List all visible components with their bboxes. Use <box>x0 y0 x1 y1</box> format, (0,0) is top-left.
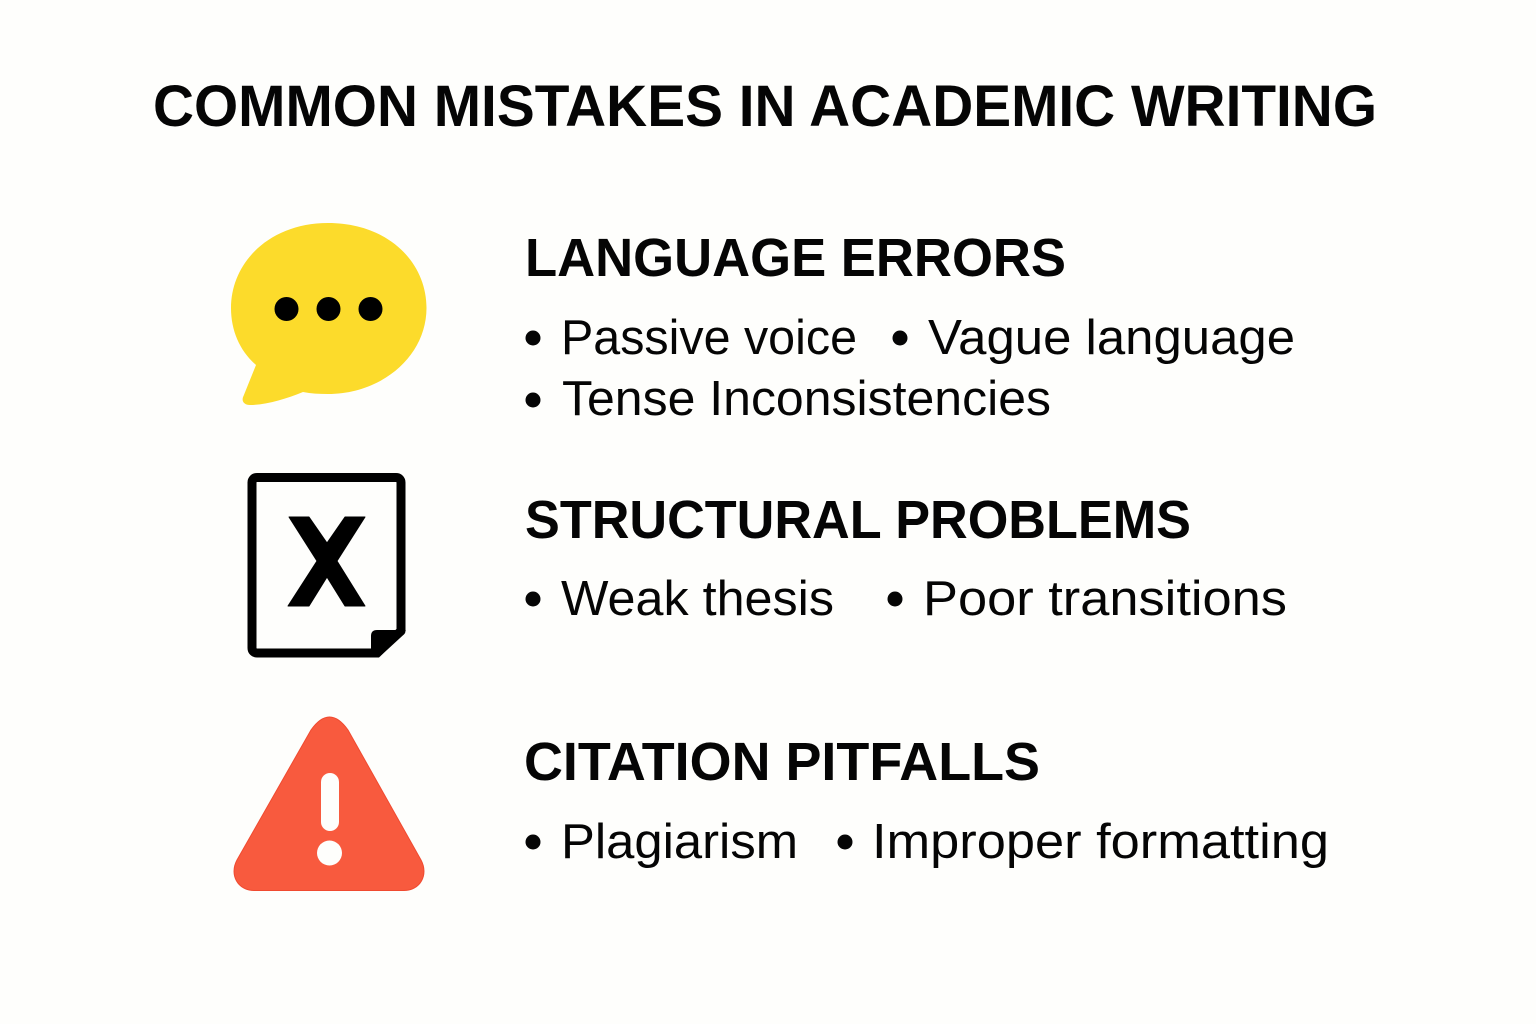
icon: red warning triangle <box>234 717 424 890</box>
panel: structural problems <box>252 478 1287 658</box>
icon: document with X <box>252 478 406 658</box>
bullet: tense inconsistencies: Tense Inconsistencies <box>562 372 1051 426</box>
panel: language errors <box>231 223 1295 426</box>
bullet: vague language: Vague language <box>928 311 1295 365</box>
title: COMMON MISTAKES IN ACADEMIC WRITING <box>153 74 1377 139</box>
panel: citation pitfalls <box>234 717 1329 890</box>
heading: structural problems: STRUCTURAL PROBLEMS <box>525 490 1191 550</box>
bullet: weak thesis: Weak thesis <box>561 572 834 626</box>
icon: yellow speech bubble <box>231 223 426 405</box>
heading: citation pitfalls: CITATION PITFALLS <box>524 732 1040 792</box>
bullet: plagiarism: Plagiarism <box>561 815 798 869</box>
bullet: passive voice: Passive voice <box>561 311 857 365</box>
bullet: improper formatting: Improper formatting <box>872 815 1329 869</box>
bullet: poor transitions: Poor transitions <box>923 572 1287 626</box>
heading: language errors: LANGUAGE ERRORS <box>525 228 1066 288</box>
